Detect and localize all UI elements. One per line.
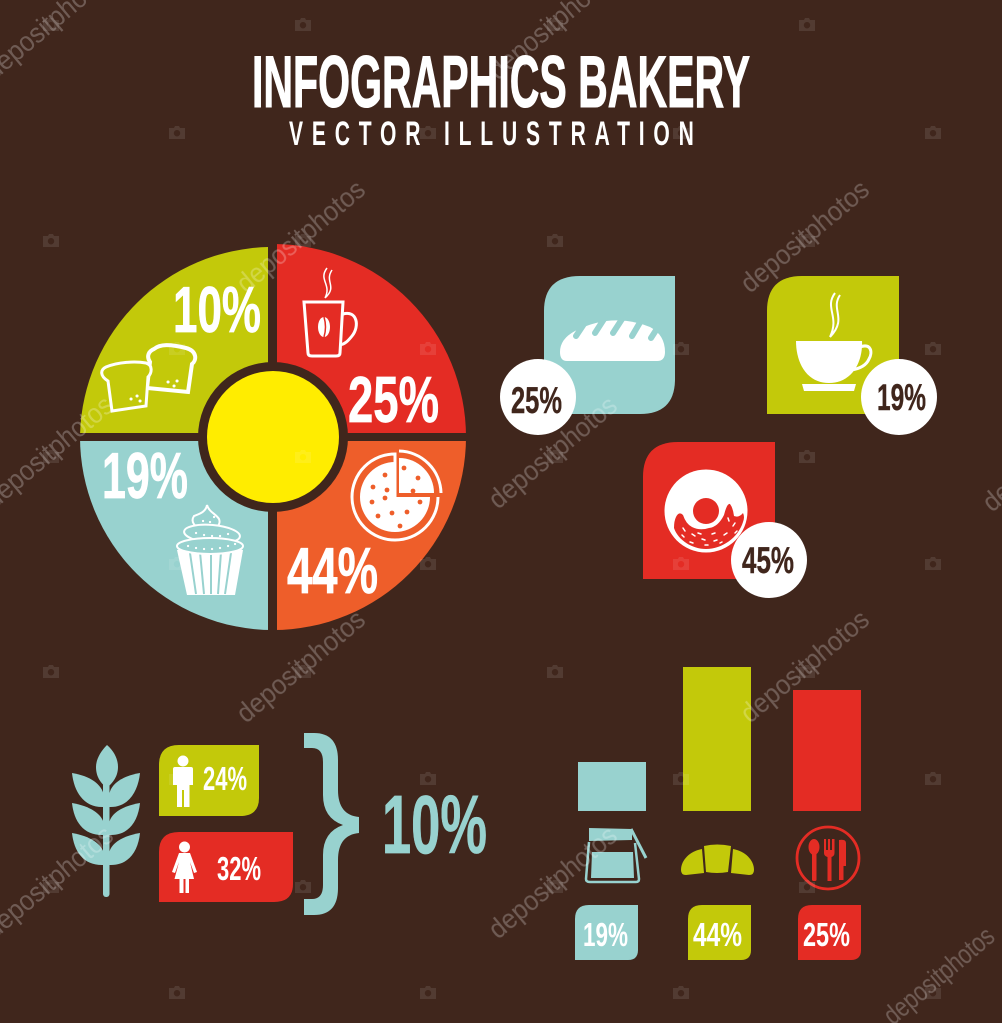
- card: female 32%: [159, 832, 293, 902]
- watermarks: depositphotos: [230, 173, 371, 299]
- card shape: [767, 276, 899, 414]
- panel: pie chart: [76, 240, 470, 630]
- watermarks: depositphotos: [482, 389, 623, 515]
- value: 19%: [583, 916, 628, 953]
- icon: pizza: [352, 451, 441, 540]
- icon: wheat: [72, 745, 140, 897]
- label 44%: 44%: [287, 534, 378, 607]
- panel: wheat demographic: [72, 733, 487, 915]
- bar green: [683, 667, 751, 811]
- icon: donut: [664, 470, 748, 552]
- pie segment: red 25%: [277, 240, 470, 433]
- value 32%: 32%: [217, 850, 261, 887]
- pie segment: teal 19%: [76, 441, 268, 630]
- badge circle: [731, 522, 807, 598]
- chip 19%: [575, 905, 638, 960]
- badge circle: [861, 359, 937, 435]
- centre yellow circle: [207, 371, 339, 503]
- bar red: [793, 690, 861, 811]
- card: male 24%: [159, 745, 259, 816]
- label 19%: 19%: [102, 439, 188, 512]
- badge value: 45%: [742, 540, 794, 581]
- watermarks: depositphotos: [482, 819, 623, 945]
- centre ring: [198, 362, 348, 512]
- chip 44%: [688, 905, 751, 960]
- pie segment: green 10%: [80, 247, 268, 433]
- icon: coffee pot: [586, 828, 646, 882]
- panel: donut card: [643, 442, 807, 598]
- badge value: 25%: [511, 380, 562, 421]
- watermarks: depositphotos: [230, 603, 371, 729]
- label 10%: 10%: [173, 273, 261, 346]
- icon: cutlery: [797, 827, 859, 889]
- value 24%: 24%: [203, 760, 247, 797]
- bar teal: [578, 762, 646, 811]
- total 10%: 10%: [382, 778, 487, 871]
- badge circle: [500, 359, 576, 435]
- icon: cupcake: [177, 505, 243, 595]
- icon: coffee cup: [796, 293, 871, 391]
- badge value: 19%: [877, 377, 926, 418]
- panel: coffee card: [767, 276, 937, 435]
- icon: toast slices: [102, 345, 195, 411]
- panel: bar chart: [575, 667, 861, 960]
- icon: croissant: [681, 844, 754, 875]
- chip 25%: [798, 905, 861, 960]
- card shape: [544, 276, 675, 414]
- icon: woman: [172, 842, 197, 893]
- value: 25%: [803, 916, 850, 953]
- icon: coffee mug: [304, 268, 356, 356]
- value: 44%: [693, 916, 742, 953]
- panel: bread card: [500, 276, 675, 435]
- icon: man: [173, 756, 193, 807]
- icon: bread loaf: [560, 316, 665, 361]
- card shape: [643, 442, 775, 579]
- watermarks: depositphotos: [734, 173, 875, 299]
- watermarks: depositphotos: [734, 603, 875, 729]
- brace: [304, 733, 359, 915]
- pie segment: orange 44%: [277, 441, 470, 630]
- subtitle: VECTOR ILLUSTRATION: [289, 114, 694, 152]
- label 25%: 25%: [348, 363, 439, 436]
